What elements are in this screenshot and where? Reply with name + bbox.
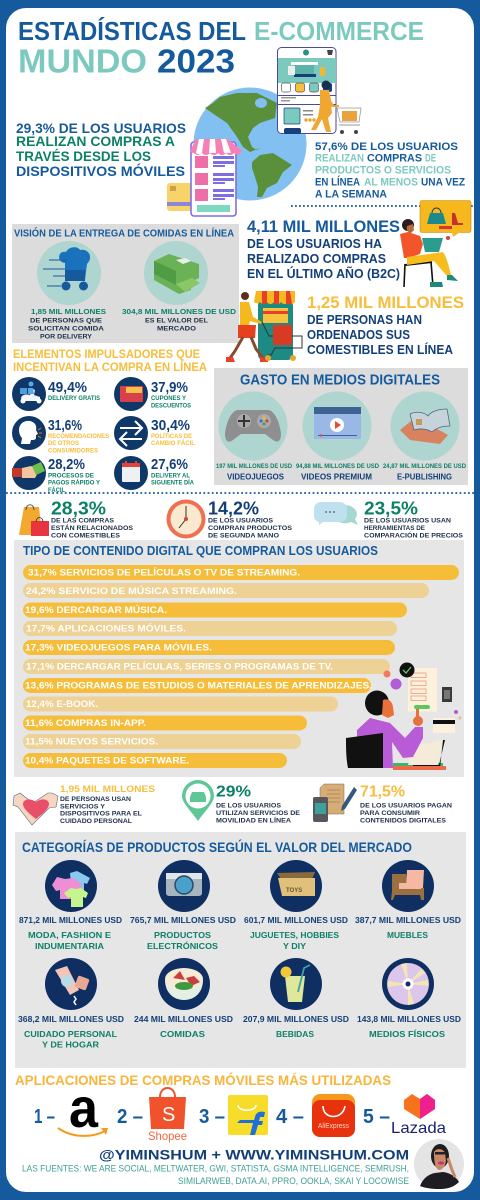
stat: next-day delivery: SIGUIENTE DÍA: [151, 478, 194, 486]
text: mobile purchases: [16, 120, 186, 179]
category: physical media: [357, 958, 461, 1039]
category: food: [134, 958, 233, 1039]
text: market value: MERCADO: [157, 326, 196, 332]
text: groceries: ORDENADOS SUS: [307, 327, 410, 342]
stat: recommendations: RECOMENDACIONES: [48, 433, 110, 440]
icon: video player: [302, 392, 372, 460]
category: fashion: 871,2 MIL MILLONES USD: [19, 916, 122, 925]
footer: sources: [22, 1164, 409, 1186]
text: premium videos: [296, 463, 379, 482]
text: groceries: COMESTIBLES EN LÍNEA: [307, 342, 454, 357]
stat: personal care: SERVICIOS Y: [60, 804, 106, 810]
bar chart: 19,6% DERCARGAR MÚSICA.: [25, 604, 167, 616]
category: fashion: [19, 860, 122, 951]
stat: recommendations: 31,6%: [48, 418, 82, 434]
text: premium videos: 94,88 MIL MILLONES DE USD: [296, 463, 379, 470]
text: weekly purchases: [315, 141, 465, 200]
stat: next-day delivery: [114, 456, 194, 490]
icon: globe: [194, 88, 306, 200]
icon: game controller: [218, 392, 288, 460]
icon: woman with laptop: [400, 219, 458, 287]
text: delivery users: SOLICITAN COMIDA: [28, 326, 104, 332]
text: groceries: [307, 293, 464, 357]
stat: groceries share: 28,3%: [51, 498, 106, 518]
category: personal care: CUIDADO PERSONAL: [24, 1029, 117, 1039]
app: Flipkart: [199, 1095, 268, 1135]
stat: mobility: 29%: [216, 784, 251, 800]
stat: exchange policy: POLÍTICAS DE: [151, 431, 193, 440]
text: weekly purchases: UNA VEZ: [421, 176, 465, 188]
stat: fast payment: FÁCIL: [48, 485, 65, 494]
text: weekly purchases: AL MENOS: [364, 176, 418, 188]
icon: open book: [390, 392, 460, 460]
category: drinks: [243, 958, 349, 1039]
bar chart: 24,2% SERVICIO DE MÚSICA STREAMING.: [26, 585, 237, 597]
stat: groceries share: ESTÁN RELACIONADOS: [51, 523, 134, 532]
stat: paid digital content: [313, 784, 452, 824]
app: Lazada: [363, 1094, 446, 1137]
stat: second hand: DE LOS USUARIOS: [208, 518, 274, 524]
text: premium videos: VIDEOS PREMIUM: [301, 472, 372, 482]
category: food: 244 MIL MILLONES USD: [134, 1015, 233, 1024]
stat: recommendations: [12, 416, 110, 454]
stat: second hand: 14,2%: [208, 498, 259, 518]
stat: free delivery: DELIVERY GRATIS: [48, 395, 101, 402]
heading: purchase drivers: [13, 347, 207, 374]
icon: online shop phone with shopper: [278, 48, 361, 134]
category: electronics: ELECTRÓNICOS: [147, 940, 218, 951]
text: e-publishing: E-PUBLISHING: [397, 472, 452, 482]
text: e-publishing: [383, 463, 466, 482]
category: personal care: 368,2 MIL MILLONES USD: [18, 1015, 124, 1024]
text: weekly purchases: PRODUCTOS O SERVICIOS: [315, 164, 451, 176]
title: MUNDO: [18, 42, 147, 80]
category: physical media: MEDIOS FÍSICOS: [369, 1029, 445, 1039]
stat: paid digital content: 71,5%: [360, 784, 405, 800]
app: Amazon: [34, 1076, 108, 1139]
text: weekly purchases: COMPRAS: [367, 152, 422, 164]
category: drinks: BEBIDAS: [276, 1029, 314, 1039]
app: Shopee: Shopee: [148, 1129, 187, 1143]
bar chart: 13,6% PROGRAMAS DE ESTUDIOS O MATERIALES DE APRENDIZAJES.: [25, 680, 372, 692]
stat: coupons: DESCUENTOS: [151, 402, 192, 410]
category: food: COMIDAS: [160, 1029, 205, 1039]
stat: paid digital content: DE LOS USUARIOS PAGAN: [360, 802, 452, 810]
panel: digital media spending: [214, 368, 468, 485]
stat: next-day delivery: 27,6%: [151, 457, 188, 473]
app: Amazon: a: [69, 1076, 99, 1139]
stat: second hand: COMPRAN PRODUCTOS: [208, 525, 293, 532]
text: B2C buyers: DE LOS USUARIOS HA: [247, 236, 383, 251]
text: weekly purchases: EN LÍNEA: [315, 176, 360, 188]
stat: fast payment: PAGOS RÁPIDO Y: [48, 478, 101, 486]
stat: price comparison: 23,5%: [364, 498, 418, 518]
bar chart: [23, 565, 459, 768]
text: weekly purchases: REALIZAN: [315, 152, 364, 164]
stat: personal care: DE PERSONAS USAN: [60, 796, 131, 803]
category: toys: [244, 860, 348, 951]
stat: coupons: 37,9%: [151, 380, 188, 396]
text: B2C buyers: EN EL ÚLTIMO AÑO (B2C): [247, 266, 400, 281]
title: ESTADÍSTICAS DEL: [18, 16, 246, 46]
title: [18, 16, 424, 80]
stat: exchange policy: CAMBIO FÁCIL: [151, 438, 195, 447]
stat: fast payment: [12, 456, 101, 494]
stat: free delivery: [12, 377, 101, 411]
stat: next-day delivery: DELIVERY AL: [151, 472, 190, 480]
category: personal care: [18, 958, 124, 1050]
stat: groceries share: [19, 498, 134, 540]
stat: groceries share: CON COMESTIBLES: [51, 532, 121, 540]
bar chart: 11,5% NUEVOS SERVICIOS.: [25, 736, 158, 748]
author photo: [414, 1139, 464, 1189]
text: videogames: [216, 463, 292, 482]
stat: coupons: [114, 377, 192, 411]
title: 2023: [157, 42, 235, 80]
footer: handle and website: @YIMINSHUM + WWW.YIMINSHUM.COM: [99, 1146, 409, 1162]
text: delivery users: 1,85 MIL MILLONES: [31, 307, 106, 316]
heading: purchase drivers: INCENTIVAN LA COMPRA EN LÍNEA: [13, 359, 207, 374]
icon: credit card: [167, 183, 197, 211]
stat: paid digital content: CONTENIDOS DIGITALES: [360, 818, 447, 824]
icon: delivery chef hat: [37, 241, 101, 305]
text: videogames: 197 MIL MILLONES DE USD: [216, 463, 292, 470]
stat: personal care: 1,95 MIL MILLONES: [60, 784, 155, 794]
text: mobile purchases: REALIZAN COMPRAS A: [16, 133, 175, 149]
stat: recommendations: DE OTROS: [48, 440, 80, 447]
heading: purchase drivers: ELEMENTOS IMPULSADORES QUE: [13, 347, 200, 361]
app: AliExpress: 4 –: [276, 1106, 304, 1128]
icon: mobile store: [190, 139, 242, 216]
text: B2C buyers: 4,11 MIL MILLONES: [247, 217, 400, 236]
category: toys: JUGUETES, HOBBIES: [250, 930, 339, 940]
text: B2C buyers: REALIZADO COMPRAS: [247, 251, 386, 266]
category: personal care: Y DE HOGAR: [42, 1040, 99, 1050]
category: fashion: MODA, FASHION E: [28, 930, 111, 940]
stat: personal care: CUIDADO PERSONAL: [60, 818, 132, 825]
stat: mobility: DE LOS USUARIOS: [216, 802, 282, 810]
app: Shopee: S: [162, 1104, 175, 1126]
icon: person paying online: [346, 662, 462, 770]
bar chart: 17,7% APLICACIONES MÓVILES.: [26, 622, 186, 634]
text: weekly purchases: 57,6% DE LOS USUARIOS: [315, 141, 458, 153]
category: toys: TOYS: [286, 888, 302, 894]
panel: product categories: [15, 832, 466, 1068]
app: Flipkart: 3 –: [199, 1106, 225, 1128]
stat: free delivery: 49,4%: [48, 380, 87, 396]
stat: second hand: [166, 498, 293, 540]
category: furniture: 387,7 MIL MILLONES USD: [355, 916, 461, 925]
text: market value: [122, 307, 237, 332]
text: videogames: VIDEOJUEGOS: [227, 472, 284, 482]
app: AliExpress: [276, 1094, 355, 1137]
app: Lazada: 5 –: [363, 1106, 390, 1128]
text: market value: 304,8 MIL MILLONES DE USD: [122, 307, 237, 316]
stat: mobility: MOVILIDAD EN LÍNEA: [216, 816, 291, 824]
stat: price comparison: HERRAMIENTAS DE: [364, 525, 426, 532]
category: fashion: INDUMENTARIA: [35, 941, 104, 951]
icon: money: [144, 241, 208, 305]
category: physical media: 143,8 MIL MILLONES USD: [357, 1015, 461, 1024]
text: mobile purchases: TRAVÉS DESDE LOS: [16, 148, 151, 164]
icon: grocery shopper: [226, 291, 302, 362]
app: Shopee: [117, 1088, 187, 1143]
heading: digital content: TIPO DE CONTENIDO DIGITAL QUE COMPRAN LOS USUARIOS: [23, 544, 378, 558]
category: furniture: [355, 860, 461, 940]
text: weekly purchases: DE: [425, 152, 436, 164]
text: delivery users: DE PERSONAS QUE: [30, 318, 103, 324]
stat: second hand: DE SEGUNDA MANO: [208, 532, 279, 540]
text: mobile purchases: 29,3% DE LOS USUARIOS: [16, 120, 186, 136]
category: electronics: PRODUCTOS: [154, 930, 211, 940]
category: toys: 601,7 MIL MILLONES USD: [244, 916, 348, 925]
category: toys: Y DIY: [283, 941, 306, 951]
bar chart: 10,4% PAQUETES DE SOFTWARE.: [25, 756, 189, 766]
app: AliExpress: AliExpress: [318, 1123, 349, 1130]
category: furniture: MUEBLES: [387, 930, 428, 940]
category: electronics: [130, 860, 236, 951]
panel: digital content: [14, 540, 464, 777]
title: E-COMMERCE: [254, 16, 424, 46]
stat: fast payment: PROCESOS DE: [48, 472, 95, 480]
stat: coupons: CUPONES Y: [151, 395, 187, 402]
text: mobile purchases: DISPOSITIVOS MÓVILES: [16, 162, 185, 179]
stat: price comparison: DE LOS USUARIOS USAN: [364, 518, 451, 524]
icon: shopping ad bubble: [420, 200, 471, 237]
stat: exchange policy: [114, 416, 195, 450]
stat: recommendations: CONSUMIDORES: [48, 448, 99, 454]
heading: product categories: CATEGORÍAS DE PRODUCTOS SEGÚN EL VALOR DEL MERCADO: [22, 838, 412, 855]
stat: exchange policy: 30,4%: [151, 418, 190, 434]
stat: price comparison: COMPARACIÓN DE PRECIOS: [364, 530, 464, 540]
text: delivery users: POR DELIVERY: [40, 334, 93, 340]
text: delivery users: [28, 307, 106, 340]
text: weekly purchases: A LA SEMANA: [315, 188, 387, 200]
footer: sources: SIMILARWEB, DATA.AI, PPRO, OOKLA, SKAI Y LOCOWISE: [178, 1176, 409, 1186]
text: e-publishing: 24,87 MIL MILLONES DE USD: [383, 463, 466, 470]
bar chart: 31,7% SERVICIOS DE PELÍCULAS O TV DE STREAMING.: [28, 568, 300, 578]
stat: personal care: DISPOSITIVOS PARA EL: [60, 810, 142, 818]
heading: digital media spending: GASTO EN MEDIOS DIGITALES: [240, 372, 440, 388]
text: market value: ES EL VALOR DEL: [145, 318, 208, 324]
stat: personal care: [13, 784, 155, 825]
panel: food delivery: [12, 224, 239, 343]
app: Lazada: Lazada: [391, 1120, 446, 1137]
footer: sources: LAS FUENTES: WE ARE SOCIAL, MELTWATER, GWI, STATISTA, GSMA INTELLIGENCE, SEMRUSH,: [22, 1164, 409, 1174]
text: B2C buyers: [247, 217, 400, 281]
heading: shopping apps: APLICACIONES DE COMPRAS MÓVILES MÁS UTILIZADAS: [15, 1073, 391, 1088]
stat: paid digital content: PARA CONSUMIR: [360, 810, 420, 817]
bar chart: 17,3% VIDEOJUEGOS PARA MÓVILES.: [25, 642, 212, 654]
category: electronics: 765,7 MIL MILLONES USD: [130, 916, 236, 925]
text: groceries: 1,25 MIL MILLONES: [307, 293, 464, 312]
panel: purchase drivers stats: [12, 377, 195, 494]
stat: mobility: [182, 780, 301, 824]
bar chart: 12,4% E-BOOK.: [26, 699, 98, 710]
heading: food delivery: VISIÓN DE LA ENTREGA DE COMIDAS EN LÍNEA: [14, 226, 234, 240]
stat: mobility: UTILIZAN SERVICIOS DE: [216, 810, 301, 817]
bar chart: 17,1% DERCARGAR PELÍCULAS, SERIES O PROGRAMAS DE TV.: [26, 662, 333, 672]
app: Amazon: 1 –: [34, 1106, 55, 1128]
stat: groceries share: DE LAS COMPRAS: [51, 518, 115, 524]
stat: price comparison: [314, 498, 464, 540]
text: groceries: DE PERSONAS HAN: [307, 312, 422, 327]
bar chart: 11,6% COMPRAS IN-APP.: [25, 718, 146, 729]
app: Shopee: 2 –: [117, 1106, 143, 1128]
category: drinks: 207,9 MIL MILLONES USD: [243, 1015, 349, 1024]
stat: fast payment: 28,2%: [48, 457, 85, 473]
